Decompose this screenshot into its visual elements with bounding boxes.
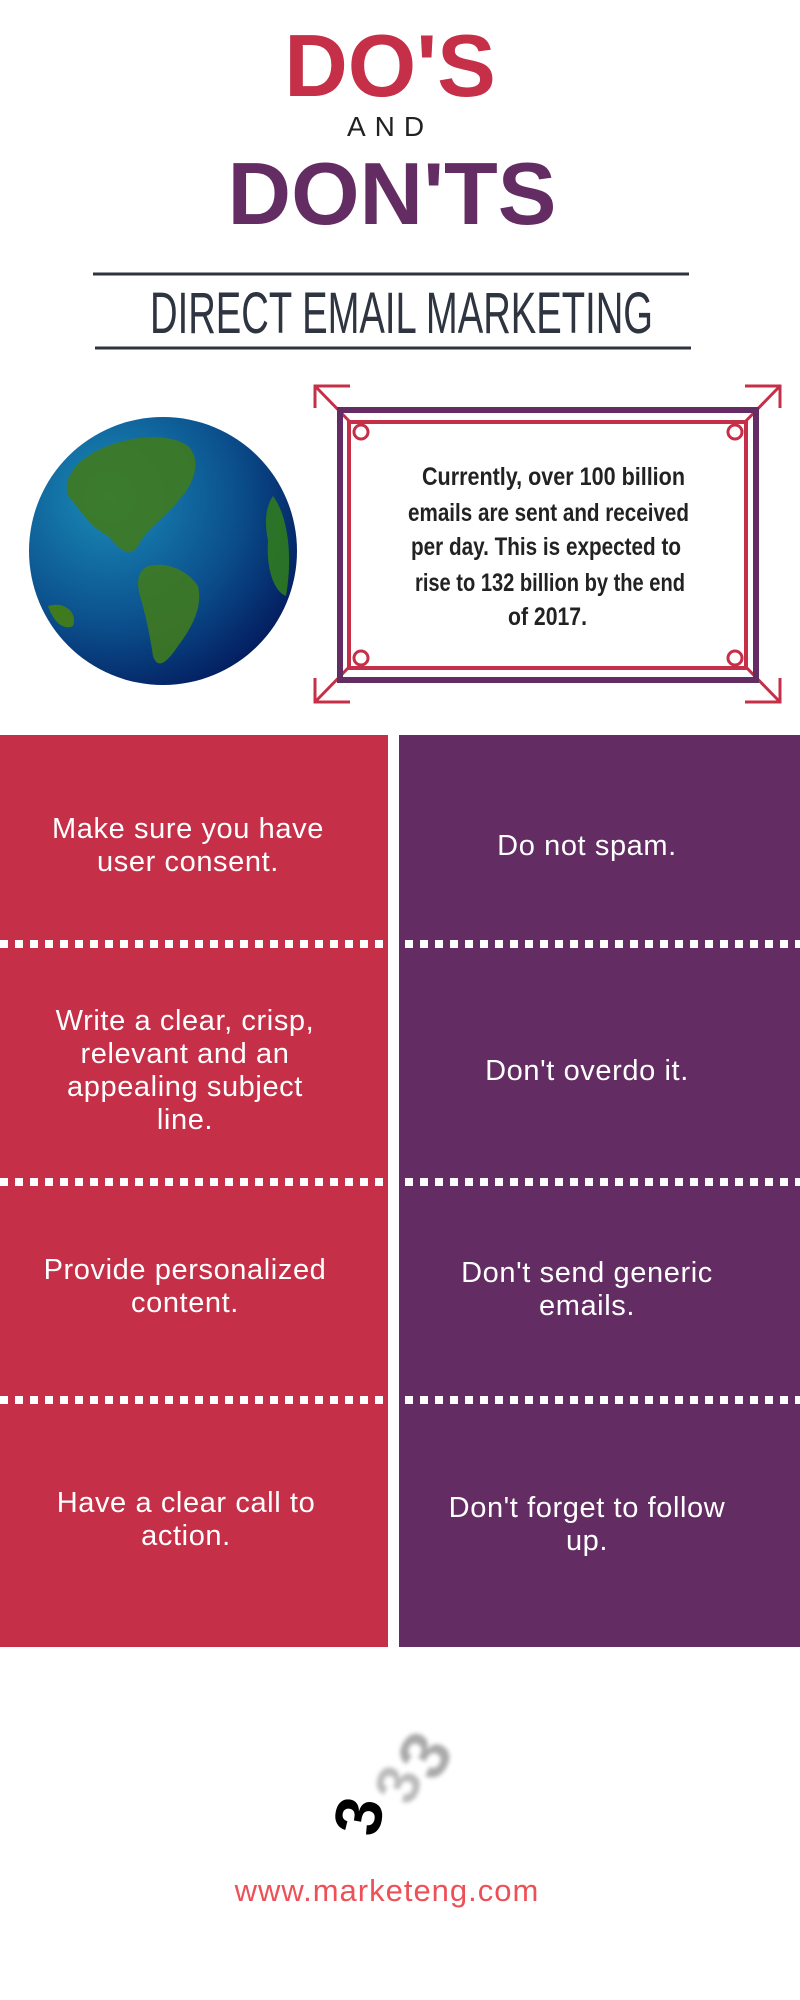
icon: globe	[29, 417, 297, 685]
don't 4: up.	[566, 1524, 608, 1556]
panel: do's column	[0, 735, 388, 1647]
do 1: Make sure you have	[52, 813, 324, 845]
panel: don'ts column	[399, 735, 800, 1647]
logo: 3	[381, 1719, 468, 1791]
don't 3: Don't send generic	[461, 1257, 713, 1289]
do 3	[44, 1254, 326, 1319]
don't 4	[449, 1492, 725, 1556]
callout: email statistics frame: rise to 132 billion by the end	[415, 569, 685, 597]
title: DO'S: DO'S	[284, 16, 496, 115]
callout: email statistics frame: emails are sent and received	[408, 499, 689, 527]
do 2: line.	[157, 1104, 213, 1136]
do 4: action.	[141, 1520, 231, 1552]
do 2: appealing subject	[67, 1071, 303, 1103]
do 4	[57, 1486, 315, 1552]
callout: email statistics frame	[314, 384, 782, 704]
callout: email statistics frame: of 2017.	[508, 603, 587, 631]
do 2: Write a clear, crisp,	[56, 1005, 314, 1037]
do 2	[56, 1005, 314, 1136]
don't 3: emails.	[539, 1290, 635, 1322]
do 3: content.	[131, 1287, 239, 1319]
don't 2: Don't overdo it.	[485, 1054, 689, 1086]
callout: email statistics frame: per day. This is expected to	[411, 533, 681, 561]
do 3: Provide personalized	[44, 1254, 326, 1286]
do 1: user consent.	[97, 846, 279, 878]
do 2: relevant and an	[81, 1038, 289, 1070]
logo	[319, 1719, 468, 1841]
don't 3	[461, 1257, 713, 1322]
do 4: Have a clear call to	[57, 1486, 315, 1518]
logo: 3	[319, 1791, 398, 1841]
do 1	[52, 813, 324, 878]
title: DON'TS: DON'TS	[228, 144, 556, 243]
title: AND: AND	[347, 111, 433, 142]
don't 4: Don't forget to follow	[449, 1492, 725, 1524]
don't 1: Do not spam.	[497, 830, 677, 862]
callout: email statistics frame: Currently, over 100 billion	[422, 463, 685, 491]
footer url: www.marketeng.com	[235, 1873, 539, 1908]
logo: 3	[362, 1757, 436, 1812]
